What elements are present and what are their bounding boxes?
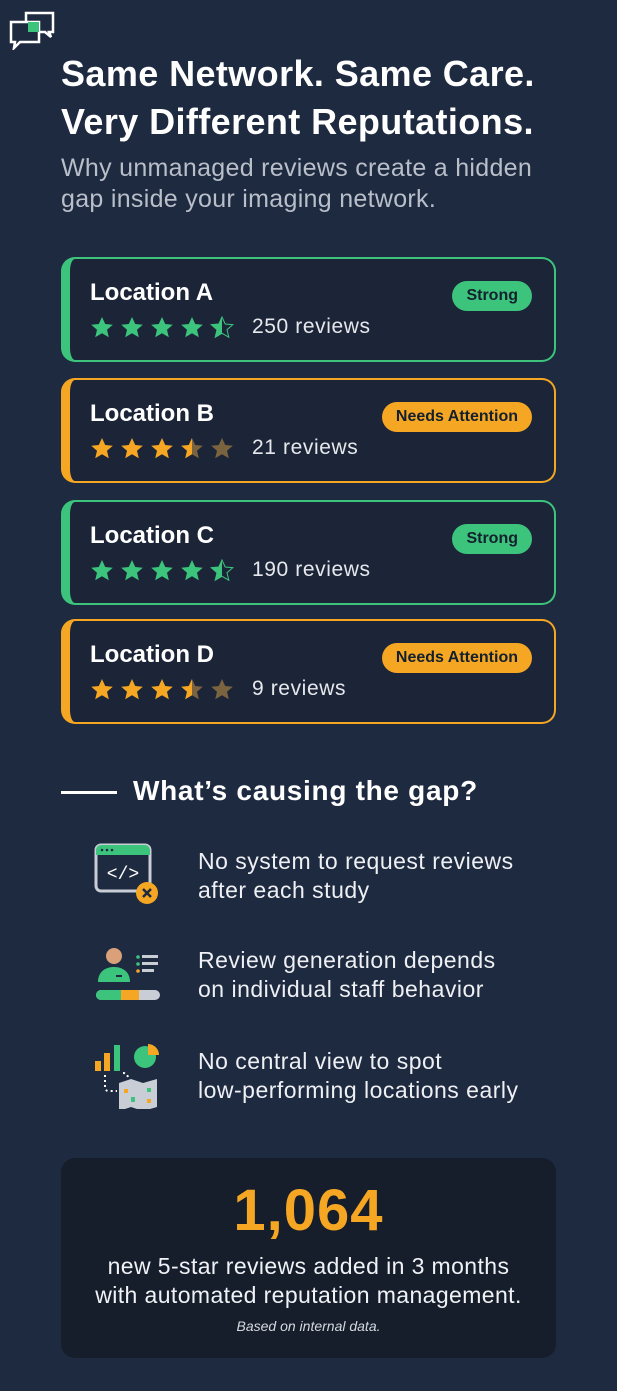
cause 1: No system to request reviews [198, 848, 514, 874]
panel: location D [61, 619, 556, 724]
icon: logo chat bubbles [10, 12, 54, 50]
panel: location C [61, 500, 556, 605]
badge [382, 643, 532, 673]
cause 2: Review generation depends [198, 947, 496, 973]
stars A [91, 316, 234, 338]
panel: location B: Location B [90, 400, 214, 427]
stat text [95, 1253, 522, 1308]
subtitle [61, 154, 532, 213]
cause 2: on individual staff behavior [198, 976, 484, 1002]
badge [382, 402, 532, 432]
badge: Strong [466, 287, 518, 304]
badge: Needs Attention [396, 408, 518, 425]
icon: code window with x [94, 844, 158, 904]
title [61, 53, 535, 142]
panel: location A: Location A [90, 279, 213, 306]
footnote: Based on internal data. [236, 1318, 380, 1334]
panel: location C: Location C [90, 522, 214, 549]
subtitle: Why unmanaged reviews create a hidden [61, 154, 532, 182]
subtitle: gap inside your imaging network. [61, 185, 436, 213]
stars B [91, 438, 233, 458]
panel: stat callout [61, 1158, 556, 1358]
cause 1 [198, 848, 514, 903]
stars C [91, 559, 234, 582]
cause 3 [198, 1048, 519, 1103]
big number: 1,064 [233, 1178, 384, 1243]
title: Very Different Reputations. [61, 101, 534, 142]
panel: location B: 21 reviews [252, 436, 358, 459]
badge [452, 281, 532, 311]
stat text: with automated reputation management. [95, 1282, 522, 1308]
panel: location A: 250 reviews [252, 315, 371, 338]
title: Same Network. Same Care. [61, 53, 535, 94]
cause 3: low-performing locations early [198, 1077, 519, 1103]
cause 3: No central view to spot [198, 1048, 442, 1074]
badge [452, 524, 532, 554]
icon: charts and map [95, 1044, 159, 1109]
cause 1: after each study [198, 877, 370, 903]
badge: Strong [466, 530, 518, 547]
icon: code window with x: </> [107, 865, 139, 885]
icon: staff person with bar [96, 948, 160, 1000]
panel: location D: 9 reviews [252, 677, 346, 700]
section heading: What’s causing the gap? [133, 775, 478, 806]
panel: location A [61, 257, 556, 362]
panel: location D: Location D [90, 641, 214, 668]
cause 2 [198, 947, 496, 1002]
badge: Needs Attention [396, 649, 518, 666]
panel: location B [61, 378, 556, 483]
panel: location C: 190 reviews [252, 558, 371, 581]
stars D [91, 679, 233, 700]
stat text: new 5-star reviews added in 3 months [108, 1253, 509, 1279]
